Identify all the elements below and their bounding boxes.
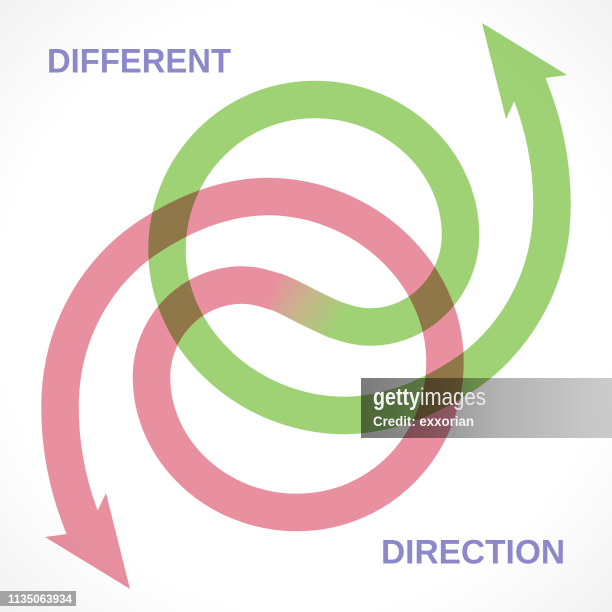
heading: different: DIFFERENT xyxy=(47,42,231,80)
colour transition between the two arrows xyxy=(274,291,338,321)
pink arrow xyxy=(45,196,445,589)
watermark: Credit: exxorian xyxy=(373,413,474,429)
image id badge xyxy=(0,591,76,606)
watermark xyxy=(361,378,612,438)
heading: direction: DIRECTION xyxy=(381,534,565,572)
watermark: getty xyxy=(373,384,421,411)
watermark: images xyxy=(420,384,486,411)
green arrow xyxy=(167,23,567,416)
image id badge: 1135063934 xyxy=(8,594,73,606)
